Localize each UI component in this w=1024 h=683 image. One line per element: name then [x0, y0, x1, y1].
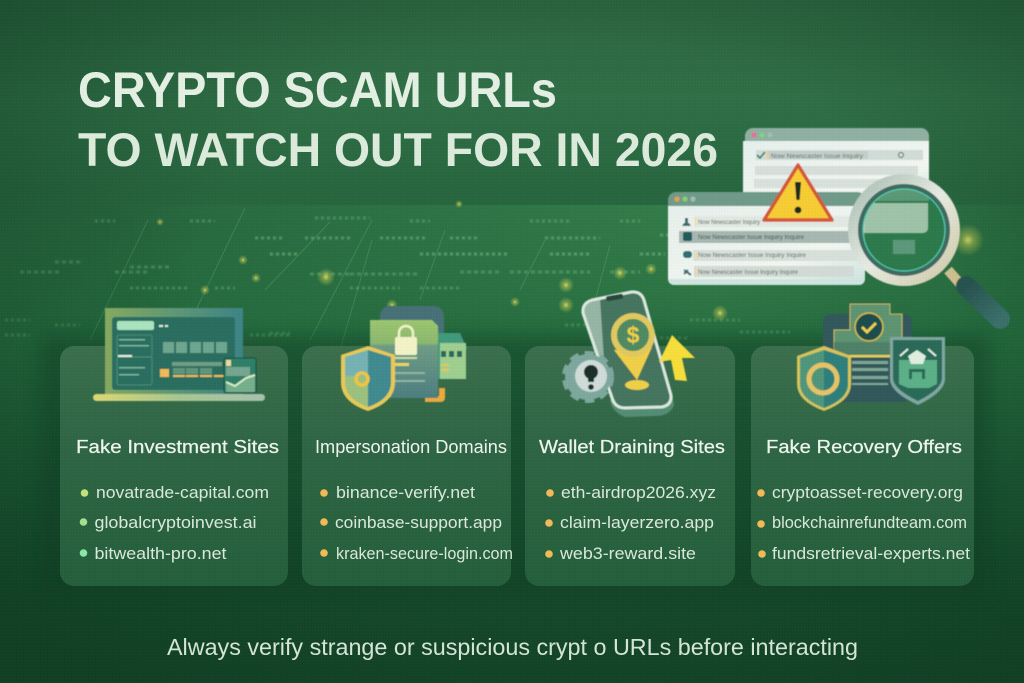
icon: padlock document and shield [341, 306, 467, 411]
panel: fake investment sites [60, 308, 288, 586]
url list: web3-reward.site [559, 544, 696, 563]
card heading: Fake Investment Sites [76, 436, 279, 457]
url list: kraken-secure-login.com [336, 544, 513, 563]
front browser window: Now Newscaster Issue Inquiry Inquire [698, 253, 807, 259]
url list [545, 483, 716, 563]
back browser window: Now Newscaster Issue Inquiry [771, 154, 863, 160]
footer note: Always verify strange or suspicious crypt o URLs before interacting [167, 634, 858, 660]
url list: claim-layerzero.app [560, 513, 714, 532]
url list [320, 483, 513, 563]
card heading: Impersonation Domains [315, 436, 507, 457]
url list: binance-verify.net [336, 483, 475, 502]
icon: phone with pin, gear and arrow [565, 292, 695, 417]
illustration: browser windows with warning and magnifier [668, 128, 1000, 319]
url list: blockchainrefundteam.com [772, 513, 967, 532]
front browser window: Now Newscaster Issue Inquiry Inquire [698, 235, 805, 241]
back browser window [743, 128, 929, 201]
title: CRYPTO SCAM URLs [78, 62, 557, 118]
url list: novatrade-capital.com [96, 483, 269, 502]
icon: phone with pin, gear and arrow: $ [627, 322, 640, 348]
url list: globalcryptoinvest.ai [94, 513, 256, 532]
url list: coinbase-support.app [335, 513, 502, 532]
url list [80, 483, 269, 563]
icon: laptop [93, 308, 265, 401]
url list: eth-airdrop2026.xyz [561, 483, 716, 502]
front browser window [668, 192, 865, 285]
url list: fundsretrieval-experts.net [772, 544, 970, 563]
panel: fake recovery offers [751, 303, 974, 586]
url list [757, 483, 970, 563]
url list: bitwealth-pro.net [94, 544, 227, 563]
front browser window: Now Newscaster Inquiry [698, 220, 760, 226]
icon: magnifying glass [853, 179, 1000, 319]
card heading: Wallet Draining Sites [539, 436, 725, 457]
icon: document with shields [797, 303, 945, 411]
title [78, 62, 718, 176]
front browser window: Now Newscaster Issue Inquiry Inquire [698, 270, 799, 276]
panel: wallet draining sites [525, 292, 735, 586]
title: TO WATCH OUT FOR IN 2026 [78, 123, 718, 176]
url list: cryptoasset-recovery.org [772, 483, 963, 502]
card heading: Fake Recovery Offers [766, 436, 962, 457]
icon: warning triangle [764, 165, 832, 220]
panel: impersonation domains [302, 306, 513, 586]
